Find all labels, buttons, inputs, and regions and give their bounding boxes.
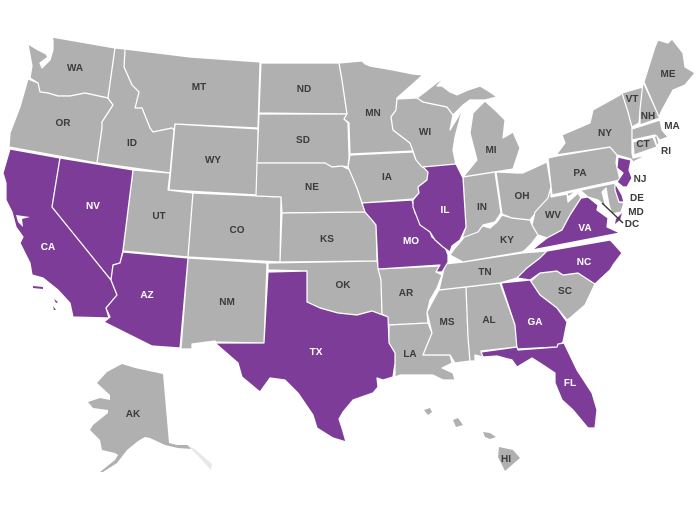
state: Minnesota: MN — [365, 108, 381, 119]
state: New York: NY — [598, 128, 612, 139]
state: Oregon: OR — [56, 118, 71, 129]
state: Kentucky — [450, 215, 538, 262]
state: South Carolina — [530, 271, 595, 320]
state: New Mexico: NM — [219, 297, 235, 308]
leader line: DC — [602, 203, 623, 223]
outside labels for small northeastern states: DE — [630, 193, 644, 204]
state: Colorado: CO — [230, 225, 245, 236]
state: New Mexico — [181, 258, 267, 349]
state: Idaho — [97, 48, 174, 173]
state: Wisconsin — [391, 98, 463, 167]
state: Montana — [124, 49, 260, 132]
state: New Hampshire: NH — [641, 111, 655, 122]
outside labels for small northeastern states: MD — [628, 207, 644, 218]
state: Utah — [123, 170, 193, 257]
state: Vermont: VT — [626, 94, 638, 105]
state: Wyoming — [169, 124, 258, 195]
state: Ohio: OH — [514, 191, 530, 202]
state: New Hampshire — [640, 82, 660, 125]
state: Pennsylvania — [548, 147, 620, 195]
state: Missouri (highlighted): MO — [403, 236, 419, 247]
state: Alabama: AL — [482, 315, 496, 326]
state: Mississippi — [423, 287, 470, 363]
state: Kentucky: KY — [500, 235, 514, 246]
state: Tennessee — [439, 251, 547, 290]
state: Hawaii — [424, 408, 520, 471]
state: Delaware (highlighted) — [615, 183, 624, 202]
state: Hawaii: HI — [501, 454, 511, 465]
state: Vermont — [622, 87, 643, 127]
state: Virginia (highlighted) — [522, 197, 622, 252]
state: West Virginia — [532, 187, 581, 238]
outside labels for small northeastern states: MA — [664, 121, 680, 132]
state: Washington — [28, 37, 115, 98]
state: Iowa: IA — [382, 172, 392, 183]
state: Maryland — [553, 183, 624, 214]
state: Arizona (highlighted): AZ — [140, 290, 154, 301]
state: Oregon — [9, 79, 113, 163]
state: Texas (highlighted) — [215, 271, 395, 442]
state: Indiana: IN — [477, 202, 487, 213]
state: Illinois (highlighted): IL — [441, 205, 449, 216]
outside labels for small northeastern states: DC — [625, 219, 639, 230]
state: Tennessee: TN — [478, 267, 492, 278]
outside labels for small northeastern states: RI — [661, 146, 671, 157]
state: Mississippi: MS — [440, 317, 455, 328]
outside labels for small northeastern states: NJ — [634, 174, 646, 185]
state: California (highlighted) — [3, 149, 117, 318]
state: Alaska — [88, 364, 212, 472]
state: North Carolina (highlighted) — [517, 240, 622, 284]
state: Michigan upper peninsula — [417, 77, 497, 115]
state: Wyoming: WY — [205, 155, 221, 166]
state: Washington: WA — [67, 63, 83, 74]
state: Nevada (highlighted): NV — [86, 201, 100, 212]
state: Pennsylvania: PA — [573, 168, 587, 179]
state: Florida (highlighted) — [481, 343, 597, 428]
state: Arkansas: AR — [399, 288, 414, 299]
outside labels for small northeastern states — [625, 121, 680, 230]
state: Georgia (highlighted) — [501, 280, 567, 349]
state: Connecticut: CT — [636, 139, 650, 150]
state: Texas (highlighted): TX — [310, 347, 323, 358]
state: Massachusetts — [632, 120, 668, 140]
state: Connecticut — [633, 137, 657, 155]
state: Georgia (highlighted): GA — [528, 317, 542, 328]
state: Arkansas — [378, 266, 442, 325]
state: Florida (highlighted): FL — [564, 378, 576, 389]
state: Minnesota — [339, 61, 423, 154]
state: Indiana — [462, 172, 501, 238]
state: Utah: UT — [152, 211, 166, 222]
state: North Dakota — [259, 63, 347, 114]
state: Wisconsin: WI — [419, 127, 431, 138]
state: Alabama — [466, 283, 517, 361]
state: Ohio — [496, 162, 551, 220]
state: Nevada (highlighted) — [52, 158, 133, 280]
state: Kansas — [280, 212, 377, 262]
state: Michigan lower peninsula — [463, 101, 520, 177]
state: Nebraska: NE — [305, 182, 319, 193]
state: Missouri (highlighted) — [362, 200, 448, 272]
state: Louisiana — [389, 323, 455, 380]
state: Colorado — [188, 193, 281, 262]
state: New York — [556, 93, 647, 162]
state: Arizona (highlighted) — [104, 252, 188, 348]
state: Maine — [644, 39, 695, 117]
state: South Carolina: SC — [558, 286, 572, 297]
state: Maine: ME — [660, 69, 676, 80]
state: Nebraska — [256, 163, 365, 213]
state: South Dakota: SD — [296, 135, 310, 146]
state: Illinois (highlighted) — [413, 164, 466, 252]
state: Idaho: ID — [127, 138, 137, 149]
state: Virginia (highlighted): VA — [578, 223, 592, 234]
state: Rhode Island — [654, 136, 659, 146]
state: Alaska: AK — [126, 409, 141, 420]
state: Oklahoma: OK — [336, 280, 351, 291]
state: West Virginia: WV — [545, 210, 561, 221]
state: Iowa — [348, 152, 428, 203]
state: North Dakota: ND — [297, 84, 311, 95]
state: Oklahoma — [268, 261, 388, 317]
state: South Dakota — [257, 114, 349, 167]
state: Louisiana: LA — [403, 349, 417, 360]
state: Michigan lower peninsula: MI — [485, 145, 497, 156]
state: Montana: MT — [192, 82, 206, 93]
state: New Jersey (highlighted) — [617, 157, 632, 187]
state: California (highlighted): CA — [41, 242, 55, 253]
state: Kansas: KS — [320, 234, 334, 245]
state: North Carolina (highlighted): NC — [577, 257, 591, 268]
